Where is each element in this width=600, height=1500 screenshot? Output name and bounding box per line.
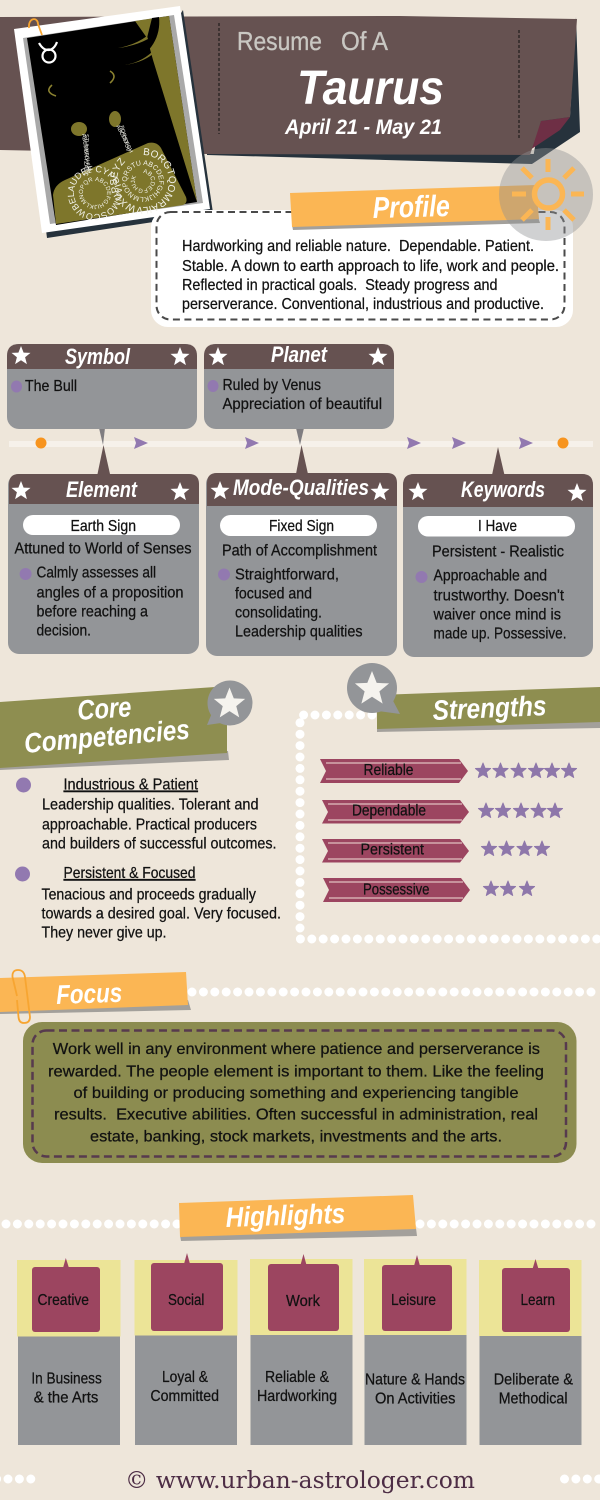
bar: possessive bbox=[323, 878, 470, 902]
heading: strengths: Strengths bbox=[432, 690, 547, 726]
column: social: Loyal & bbox=[162, 1369, 208, 1386]
card: keywords: Keywords bbox=[461, 477, 545, 502]
card: symbol: The Bull bbox=[25, 378, 77, 395]
text block: core competencies list: Persistent & Focused bbox=[64, 865, 196, 882]
card: element: Element bbox=[66, 477, 138, 502]
rating: reliable stars bbox=[475, 763, 577, 777]
text: profile description: Stable. A down to earth approach to life, work and people. bbox=[182, 258, 559, 275]
column: work: Reliable & bbox=[265, 1369, 329, 1386]
heading: highlights bbox=[179, 1195, 417, 1241]
heading: focus bbox=[0, 970, 191, 1023]
nostrils bbox=[71, 122, 87, 136]
text: profile description: perserverance. Conventional, industrious and productive. bbox=[182, 296, 544, 313]
bar: dependable: Dependable bbox=[352, 802, 426, 820]
bar: persistent bbox=[322, 839, 469, 862]
bar: reliable bbox=[320, 759, 468, 783]
icon: taurus glyph bbox=[39, 42, 57, 62]
eyes bbox=[110, 71, 114, 83]
text block: core competencies list: towards a desired goal. Very focused. bbox=[42, 906, 281, 922]
bull body bbox=[53, 143, 187, 224]
column: work: Hardworking bbox=[257, 1388, 337, 1405]
card: keywords: waiver once mind is bbox=[433, 606, 561, 624]
card: mode-qualities: Leadership qualities bbox=[235, 624, 362, 640]
text: profile description: Reflected in practical goals. Steady progress and bbox=[182, 277, 498, 294]
column: work: Work bbox=[286, 1293, 321, 1310]
card: element: Earth Sign bbox=[70, 518, 136, 535]
card: mode-qualities: consolidating. bbox=[235, 604, 322, 622]
heading: highlights: Highlights bbox=[225, 1198, 346, 1233]
card: keywords: made up. Possessive. bbox=[434, 626, 566, 642]
text: focus description: estate, banking, stock markets, investments and the arts. bbox=[90, 1128, 502, 1146]
header banner bbox=[0, 16, 580, 164]
column: social: Social bbox=[168, 1292, 204, 1309]
rating: possessive stars bbox=[483, 881, 535, 895]
heading: core competencies: Core bbox=[76, 691, 132, 726]
column: creative: & the Arts bbox=[34, 1390, 98, 1406]
card: element: before reaching a bbox=[36, 604, 148, 620]
dotted frame bbox=[300, 715, 600, 939]
bar: possessive: Possessive bbox=[363, 882, 430, 898]
letter streams and clusters: ABCDEFGHIJKLMNOPQRSTU bbox=[122, 160, 164, 202]
card: element: decision. bbox=[36, 622, 91, 640]
card: planet: Planet bbox=[271, 342, 328, 367]
column: creative: Creative bbox=[38, 1292, 89, 1309]
letter streams and clusters: ABCDEFGHIJK bbox=[130, 169, 155, 193]
card: mode-qualities: Fixed Sign bbox=[269, 518, 334, 535]
text block: core competencies list: They never give up. bbox=[42, 924, 166, 942]
column: creative bbox=[17, 1258, 120, 1445]
column: learn: Learn bbox=[520, 1292, 555, 1309]
column: leisure bbox=[364, 1255, 466, 1445]
card: mode-qualities: Mode-Qualities bbox=[233, 475, 369, 500]
letter streams and clusters bbox=[68, 126, 176, 220]
text block: core competencies list: Industrious & Patient bbox=[64, 776, 199, 794]
card: keywords bbox=[403, 447, 593, 657]
card: mode-qualities: Path of Accomplishment bbox=[222, 542, 378, 560]
text: focus description: of building or producing something and experiencing tangible bbox=[74, 1085, 519, 1102]
card: element: angles of a proposition bbox=[36, 584, 184, 602]
text: profile description: Hardworking and reliable nature. Dependable. Patient. bbox=[182, 238, 534, 255]
heading: focus: Focus bbox=[56, 978, 123, 1010]
card: mode-qualities bbox=[206, 445, 397, 656]
icon: paperclip bbox=[12, 970, 30, 1023]
card: keywords: I Have bbox=[478, 518, 517, 535]
text block: core competencies list: Tenacious and proceeds gradually bbox=[42, 886, 256, 904]
panel: profile bbox=[151, 210, 573, 327]
title: Of A bbox=[341, 26, 389, 56]
card: element bbox=[8, 445, 199, 654]
text block: core competencies list: and builders of successful outcomes. bbox=[42, 836, 276, 852]
column: social: Committed bbox=[150, 1388, 219, 1405]
icon: paperclip bbox=[29, 19, 42, 35]
bar: persistent: Persistent bbox=[360, 842, 424, 858]
title: Taurus bbox=[297, 62, 444, 115]
card: mode-qualities: Straightforward, bbox=[235, 566, 339, 584]
heading: core competencies: Competencies bbox=[23, 714, 191, 759]
text block: core competencies list: Leadership qualities. Tolerant and bbox=[42, 796, 258, 814]
heading: core competencies bbox=[0, 680, 252, 770]
olive background wedge bbox=[135, 16, 197, 202]
title: Resume bbox=[237, 26, 322, 56]
column: learn: Deliberate & bbox=[494, 1372, 573, 1388]
heading: profile: Profile bbox=[372, 190, 450, 225]
heading: profile bbox=[290, 185, 540, 230]
heading: strengths bbox=[377, 687, 600, 732]
card: planet: Ruled by Venus bbox=[222, 377, 321, 394]
timeline bbox=[9, 437, 593, 449]
card: symbol: Symbol bbox=[65, 344, 131, 369]
panel: strengths bbox=[300, 663, 600, 939]
bar: reliable: Reliable bbox=[364, 762, 414, 779]
column: leisure: Nature & Hands bbox=[365, 1372, 465, 1388]
text block: core competencies list: approachable. Practical producers bbox=[42, 816, 257, 834]
bull horn bbox=[128, 17, 159, 64]
text: profile description bbox=[182, 238, 559, 313]
card: symbol bbox=[7, 344, 197, 445]
card: element: Attuned to World of Senses bbox=[14, 540, 192, 558]
title bbox=[237, 26, 444, 139]
card: element: Calmly assesses all bbox=[36, 564, 156, 582]
column: creative: In Business bbox=[31, 1370, 102, 1388]
icon: star bubble bbox=[347, 663, 400, 714]
column: learn bbox=[479, 1259, 582, 1445]
card: keywords: Persistent - Realistic bbox=[432, 544, 564, 560]
icon: star bubble bbox=[207, 680, 252, 726]
text: focus description bbox=[48, 1041, 544, 1146]
text: focus description: rewarded. The people element is important to them. Like the feeling bbox=[48, 1064, 544, 1080]
photo: taurus bull artwork bbox=[14, 6, 213, 238]
card: planet bbox=[204, 342, 394, 445]
rating: persistent stars bbox=[481, 841, 550, 855]
column: leisure: On Activities bbox=[375, 1390, 455, 1408]
text: focus description: results. Executive abilities. Often successful in administration, real bbox=[54, 1106, 538, 1124]
footer: website credit: © www.urban-astrologer.com bbox=[125, 1468, 475, 1494]
card: planet: Appreciation of beautiful bbox=[222, 396, 382, 413]
column: work bbox=[250, 1254, 352, 1445]
text: focus description: Work well in any environment where patience and perserverance is bbox=[53, 1041, 540, 1058]
letter streams and clusters: BORGTQOMRAILVWXUPSEYZ bbox=[110, 148, 176, 214]
text block: core competencies list bbox=[15, 776, 281, 942]
icon: sun bbox=[499, 148, 593, 241]
card: mode-qualities: focused and bbox=[235, 586, 312, 602]
card: keywords: trustworthy. Doesn't bbox=[434, 588, 565, 604]
column: leisure: Leisure bbox=[391, 1292, 436, 1309]
title: April 21 - May 21 bbox=[284, 116, 442, 139]
column: learn: Methodical bbox=[499, 1390, 568, 1408]
panel: focus bbox=[23, 1022, 576, 1163]
column: social bbox=[134, 1253, 238, 1445]
rating: dependable stars bbox=[478, 803, 563, 817]
card: keywords: Approachable and bbox=[434, 568, 547, 584]
bar: dependable bbox=[322, 800, 469, 824]
